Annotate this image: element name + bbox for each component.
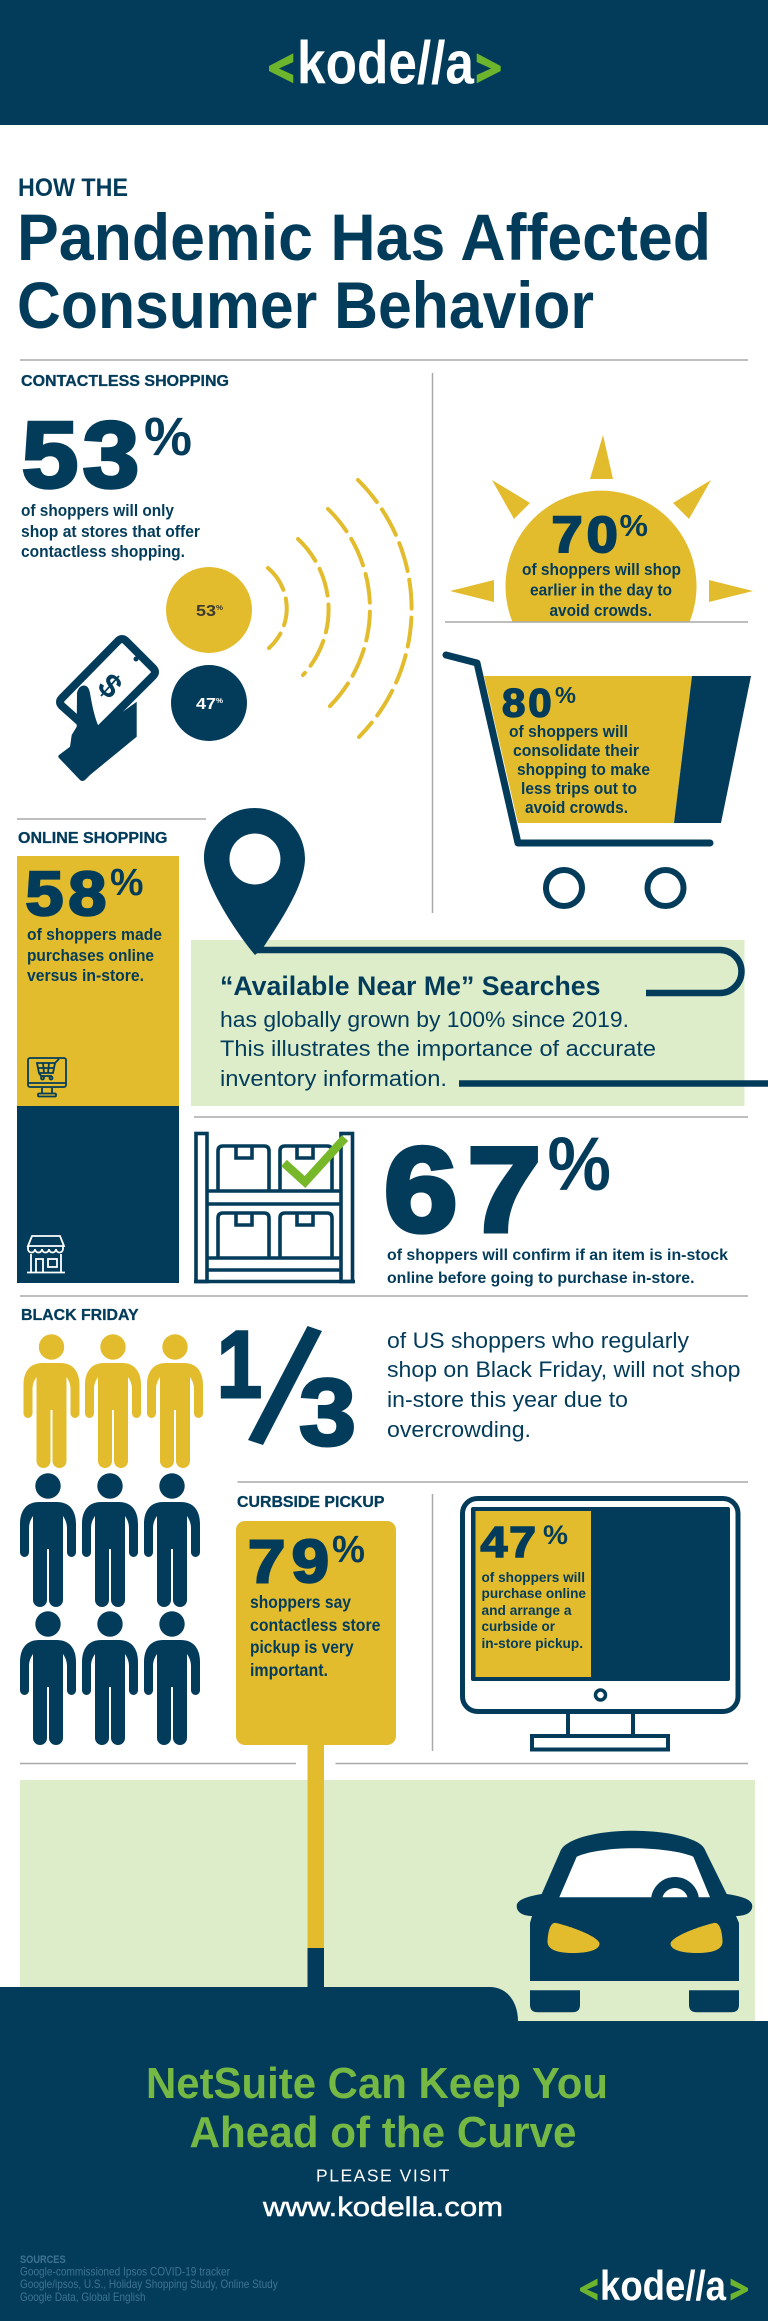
stat: 53 percent	[21, 401, 200, 561]
logo: kodella header: kode//a	[297, 30, 475, 96]
panel: online shopping bar: 58	[26, 859, 106, 928]
sources: SOURCES	[20, 2254, 66, 2266]
heading: online shopping: ONLINE SHOPPING	[18, 830, 168, 847]
chart: 47 percent circle: %	[216, 696, 223, 705]
sources: Google Data, Global English	[20, 2290, 146, 2304]
panel: green street scene	[20, 1780, 755, 2021]
logo: kodella footer: kode//a	[600, 2262, 727, 2309]
sign: 79 percent curbside: contactless store	[250, 1615, 381, 1635]
stat: 53 percent: contactless shopping.	[21, 542, 185, 561]
icon: shopping cart with 80 percent: consolidate their	[513, 741, 639, 760]
title	[17, 174, 711, 342]
panel: available near me	[191, 940, 744, 1106]
stat: one third	[217, 1311, 740, 1465]
heading: curbside pickup: CURBSIDE PICKUP	[237, 1494, 384, 1511]
stat: one third: overcrowding.	[387, 1417, 531, 1442]
icon: sun with 70 percent: of shoppers will shop	[522, 560, 681, 579]
stat: 53 percent: of shoppers will only	[21, 501, 174, 520]
chart: 47 percent circle: 47	[196, 696, 216, 713]
icon: sun with 70 percent: %	[620, 508, 648, 543]
icon: sun with 70 percent	[450, 435, 753, 622]
stat: 53 percent: %	[144, 407, 192, 467]
icon: shopping cart with 80 percent: less trips out to	[521, 779, 637, 798]
icon: shopping cart with 80 percent: avoid crowds.	[525, 798, 628, 817]
icon: online cart monitor	[28, 1058, 66, 1096]
icon: shopping cart with 80 percent: 80	[502, 680, 552, 725]
sign: 79 percent curbside: important.	[250, 1660, 328, 1680]
title: Consumer Behavior	[17, 268, 594, 342]
panel: online shopping bar: versus in-store.	[27, 966, 144, 985]
icon: computer monitor with 47 percent: curbside or	[482, 1618, 556, 1634]
chart: 53 percent circle: %	[216, 603, 223, 612]
icon: computer monitor with 47 percent: in-store pickup.	[482, 1635, 583, 1651]
call to action: Ahead of the Curve	[190, 2108, 576, 2157]
icon: computer monitor with 47 percent: of shoppers will	[482, 1569, 585, 1585]
icon: shopping cart with 80 percent: %	[555, 682, 576, 708]
sign: 79 percent curbside: 79	[248, 1528, 329, 1595]
icon: sun with 70 percent: avoid crowds.	[550, 601, 652, 620]
icon: computer monitor with 47 percent: purchase online	[482, 1585, 586, 1601]
icon: computer monitor with 47 percent: %	[543, 1520, 568, 1550]
call to action: www.kodella.com	[262, 2192, 503, 2222]
sources: Google-commissioned Ipsos COVID-19 tracker	[20, 2264, 230, 2278]
sources	[20, 2254, 278, 2304]
call to action: PLEASE VISIT	[316, 2166, 450, 2186]
panel: online shopping bar: %	[110, 862, 144, 904]
chart: pictogram of nine shoppers	[20, 1334, 203, 1745]
stat: 67 percent: 67	[384, 1123, 541, 1257]
stat: one third: of US shoppers who regularly	[387, 1328, 690, 1353]
stat: 67 percent	[384, 1122, 728, 1287]
stat: 67 percent: %	[548, 1122, 611, 1207]
icon: sun with 70 percent: 70	[552, 506, 618, 563]
panel: available near me: This illustrates the importance of accurate	[220, 1036, 656, 1061]
header band	[0, 0, 768, 125]
call to action	[146, 2059, 608, 2222]
icon: computer monitor with 47 percent	[462, 1498, 738, 1750]
icon: warehouse shelves with check	[194, 1134, 355, 1282]
icon: car front view	[517, 1831, 752, 2012]
icon: sun with 70 percent: earlier in the day to	[530, 580, 672, 600]
call to action: NetSuite Can Keep You	[146, 2059, 608, 2108]
sign: 79 percent curbside: %	[332, 1529, 365, 1571]
stat: 67 percent: online before going to purchase in-store.	[387, 1270, 694, 1287]
stat: 67 percent: of shoppers will confirm if an item is in-stock	[387, 1247, 728, 1264]
stat: 53 percent: shop at stores that offer	[21, 522, 200, 541]
icon: contactless signal waves	[268, 480, 412, 737]
stat: one third: shop on Black Friday, will not shop	[387, 1357, 740, 1382]
icon: computer monitor with 47 percent: and arrange a	[482, 1602, 572, 1618]
sign: 79 percent curbside: pickup is very	[250, 1637, 354, 1657]
panel: available near me: inventory information.	[220, 1066, 447, 1091]
sources: Google/ipsos, U.S., Holiday Shopping Study, Online Study	[20, 2277, 278, 2291]
icon: shopping cart with 80 percent: of shoppers will	[509, 722, 628, 741]
stat: one third: 3	[299, 1359, 356, 1465]
icon: hand holding phone: $	[91, 666, 130, 706]
icon: hand holding phone	[58, 639, 155, 781]
heading: contactless shopping: CONTACTLESS SHOPPING	[21, 373, 229, 390]
icon: route line	[255, 950, 768, 1084]
title: HOW THE	[18, 174, 128, 202]
panel: available near me: “Available Near Me” Searches	[220, 971, 600, 1001]
stat: one third: 1	[217, 1311, 262, 1417]
stat: 53 percent: 53	[22, 401, 139, 507]
panel: online shopping bar: of shoppers made	[27, 925, 162, 944]
icon: shopping cart with 80 percent	[446, 655, 751, 906]
stat: one third: in-store this year due to	[387, 1387, 628, 1412]
panel: available near me: has globally grown by 100% since 2019.	[220, 1007, 629, 1032]
icon: store	[27, 1236, 65, 1272]
chart: 53 percent circle	[166, 567, 252, 653]
heading: black friday: BLACK FRIDAY	[21, 1307, 139, 1324]
title: Pandemic Has Affected	[17, 200, 711, 274]
icon: shopping cart with 80 percent: shopping to make	[517, 760, 650, 779]
sign: 79 percent curbside: shoppers say	[250, 1592, 351, 1612]
sign: 79 percent curbside	[236, 1521, 396, 1988]
footer band	[0, 1987, 768, 2321]
icon: computer monitor with 47 percent: 47	[480, 1517, 536, 1567]
panel: online shopping bar	[17, 856, 179, 1283]
panel: online shopping bar: purchases online	[27, 946, 154, 965]
chart: 47 percent circle	[171, 665, 247, 741]
icon: map pin	[204, 808, 305, 955]
chart: 53 percent circle: 53	[196, 603, 216, 620]
